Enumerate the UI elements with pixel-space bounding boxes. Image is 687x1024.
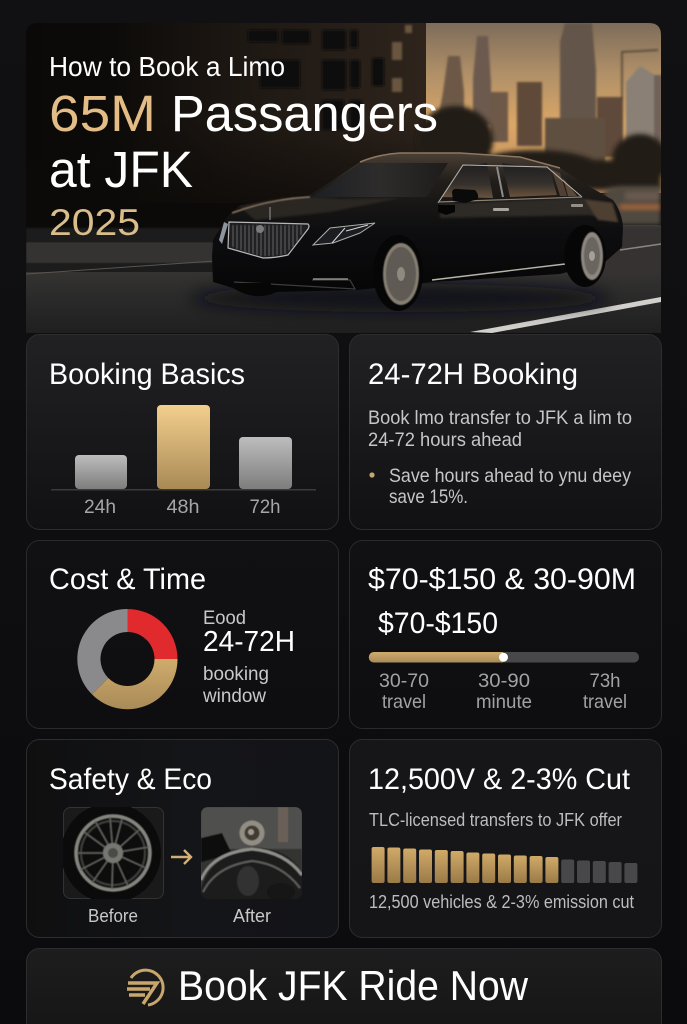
dark building	[154, 23, 426, 195]
heading: cost and time: Cost & Time	[49, 563, 206, 596]
progress labels: travel	[583, 691, 627, 713]
progress labels: 30-70	[379, 670, 429, 692]
grille	[228, 222, 309, 258]
street backdrop under building	[191, 148, 416, 203]
car shadow	[190, 284, 610, 312]
sky	[420, 23, 661, 193]
panel: cost and time	[26, 540, 338, 728]
donut caption: window	[202, 685, 267, 707]
progress labels: minute	[476, 691, 532, 713]
city skyline	[436, 23, 662, 168]
progress labels: travel	[382, 691, 426, 713]
heading: vehicles and emissions: 12,500V & 2-3% Cut	[368, 763, 630, 796]
rear wheel	[564, 225, 606, 287]
hero title: intro line: How to Book a Limo	[49, 51, 285, 82]
after image: wheel detail	[199, 807, 304, 901]
panel: booking basics	[26, 334, 338, 530]
windshield	[313, 163, 448, 197]
before image: wheel	[61, 803, 164, 903]
hero title: location: at JFK	[49, 141, 193, 198]
heading: safety and eco: Safety & Eco	[49, 763, 212, 796]
front wheel	[373, 235, 423, 311]
panel: vehicles and emissions	[350, 740, 662, 938]
mirror	[452, 189, 478, 203]
arrow	[171, 850, 191, 864]
bullet point: save 15%.	[389, 486, 468, 508]
donut caption: 24-72H	[203, 626, 295, 658]
progress labels: 73h	[590, 670, 620, 692]
bar chart: booking lead time: 24h	[84, 496, 116, 518]
progress labels: 30-90	[478, 670, 530, 692]
donut chart	[77, 609, 178, 709]
body text	[368, 407, 632, 451]
bar chart: booking lead time: 72h	[250, 496, 280, 518]
donut caption: booking	[203, 663, 269, 685]
icon: gold speed emblem	[127, 970, 163, 1005]
highlights	[240, 197, 400, 220]
lower trim	[234, 280, 355, 289]
hero title: year: 2025	[49, 202, 140, 243]
image captions: After	[233, 905, 271, 926]
heading: 24-72h booking: 24-72H Booking	[368, 358, 578, 391]
chart caption: 12,500 vehicles & 2-3% emission cut	[369, 892, 634, 912]
panel: safety and eco	[26, 740, 338, 938]
limousine body	[212, 153, 623, 292]
hero title: passengers: Passangers	[171, 85, 438, 142]
donut caption	[202, 607, 295, 707]
side windows	[442, 163, 493, 198]
panel: 24-72h booking	[350, 334, 662, 530]
heading: booking basics: Booking Basics	[49, 358, 245, 391]
headlight	[313, 223, 375, 245]
door handles	[493, 208, 509, 211]
pavement and road	[26, 228, 226, 242]
descending bar chart	[372, 847, 637, 883]
heading: price and duration: $70-$150 & 30-90M	[368, 563, 636, 596]
button label: Book JFK Ride Now	[178, 962, 529, 1009]
bar chart: booking lead time: 48h	[166, 496, 200, 518]
bar chart: booking lead time	[51, 405, 316, 518]
image captions	[88, 905, 271, 926]
progress labels	[379, 670, 627, 713]
bullet point	[369, 465, 631, 508]
donut caption: Eood	[203, 607, 246, 629]
panel: price and duration	[350, 540, 662, 728]
image captions: Before	[88, 905, 138, 926]
bullet point: Save hours ahead to ynu deey	[389, 465, 631, 487]
body text: Book lmo transfer to JFK a lim to	[368, 407, 632, 429]
body text: 24-72 hours ahead	[368, 429, 522, 451]
price figure: $70-$150	[378, 607, 498, 640]
trees	[417, 106, 668, 194]
description: TLC-licensed transfers to JFK offer	[369, 810, 622, 830]
hero banner with limousine photo	[26, 23, 668, 333]
hero title: main figure: 65M	[49, 85, 156, 142]
distant car	[602, 186, 661, 225]
progress bar	[369, 652, 639, 662]
call to action button	[26, 948, 662, 1024]
